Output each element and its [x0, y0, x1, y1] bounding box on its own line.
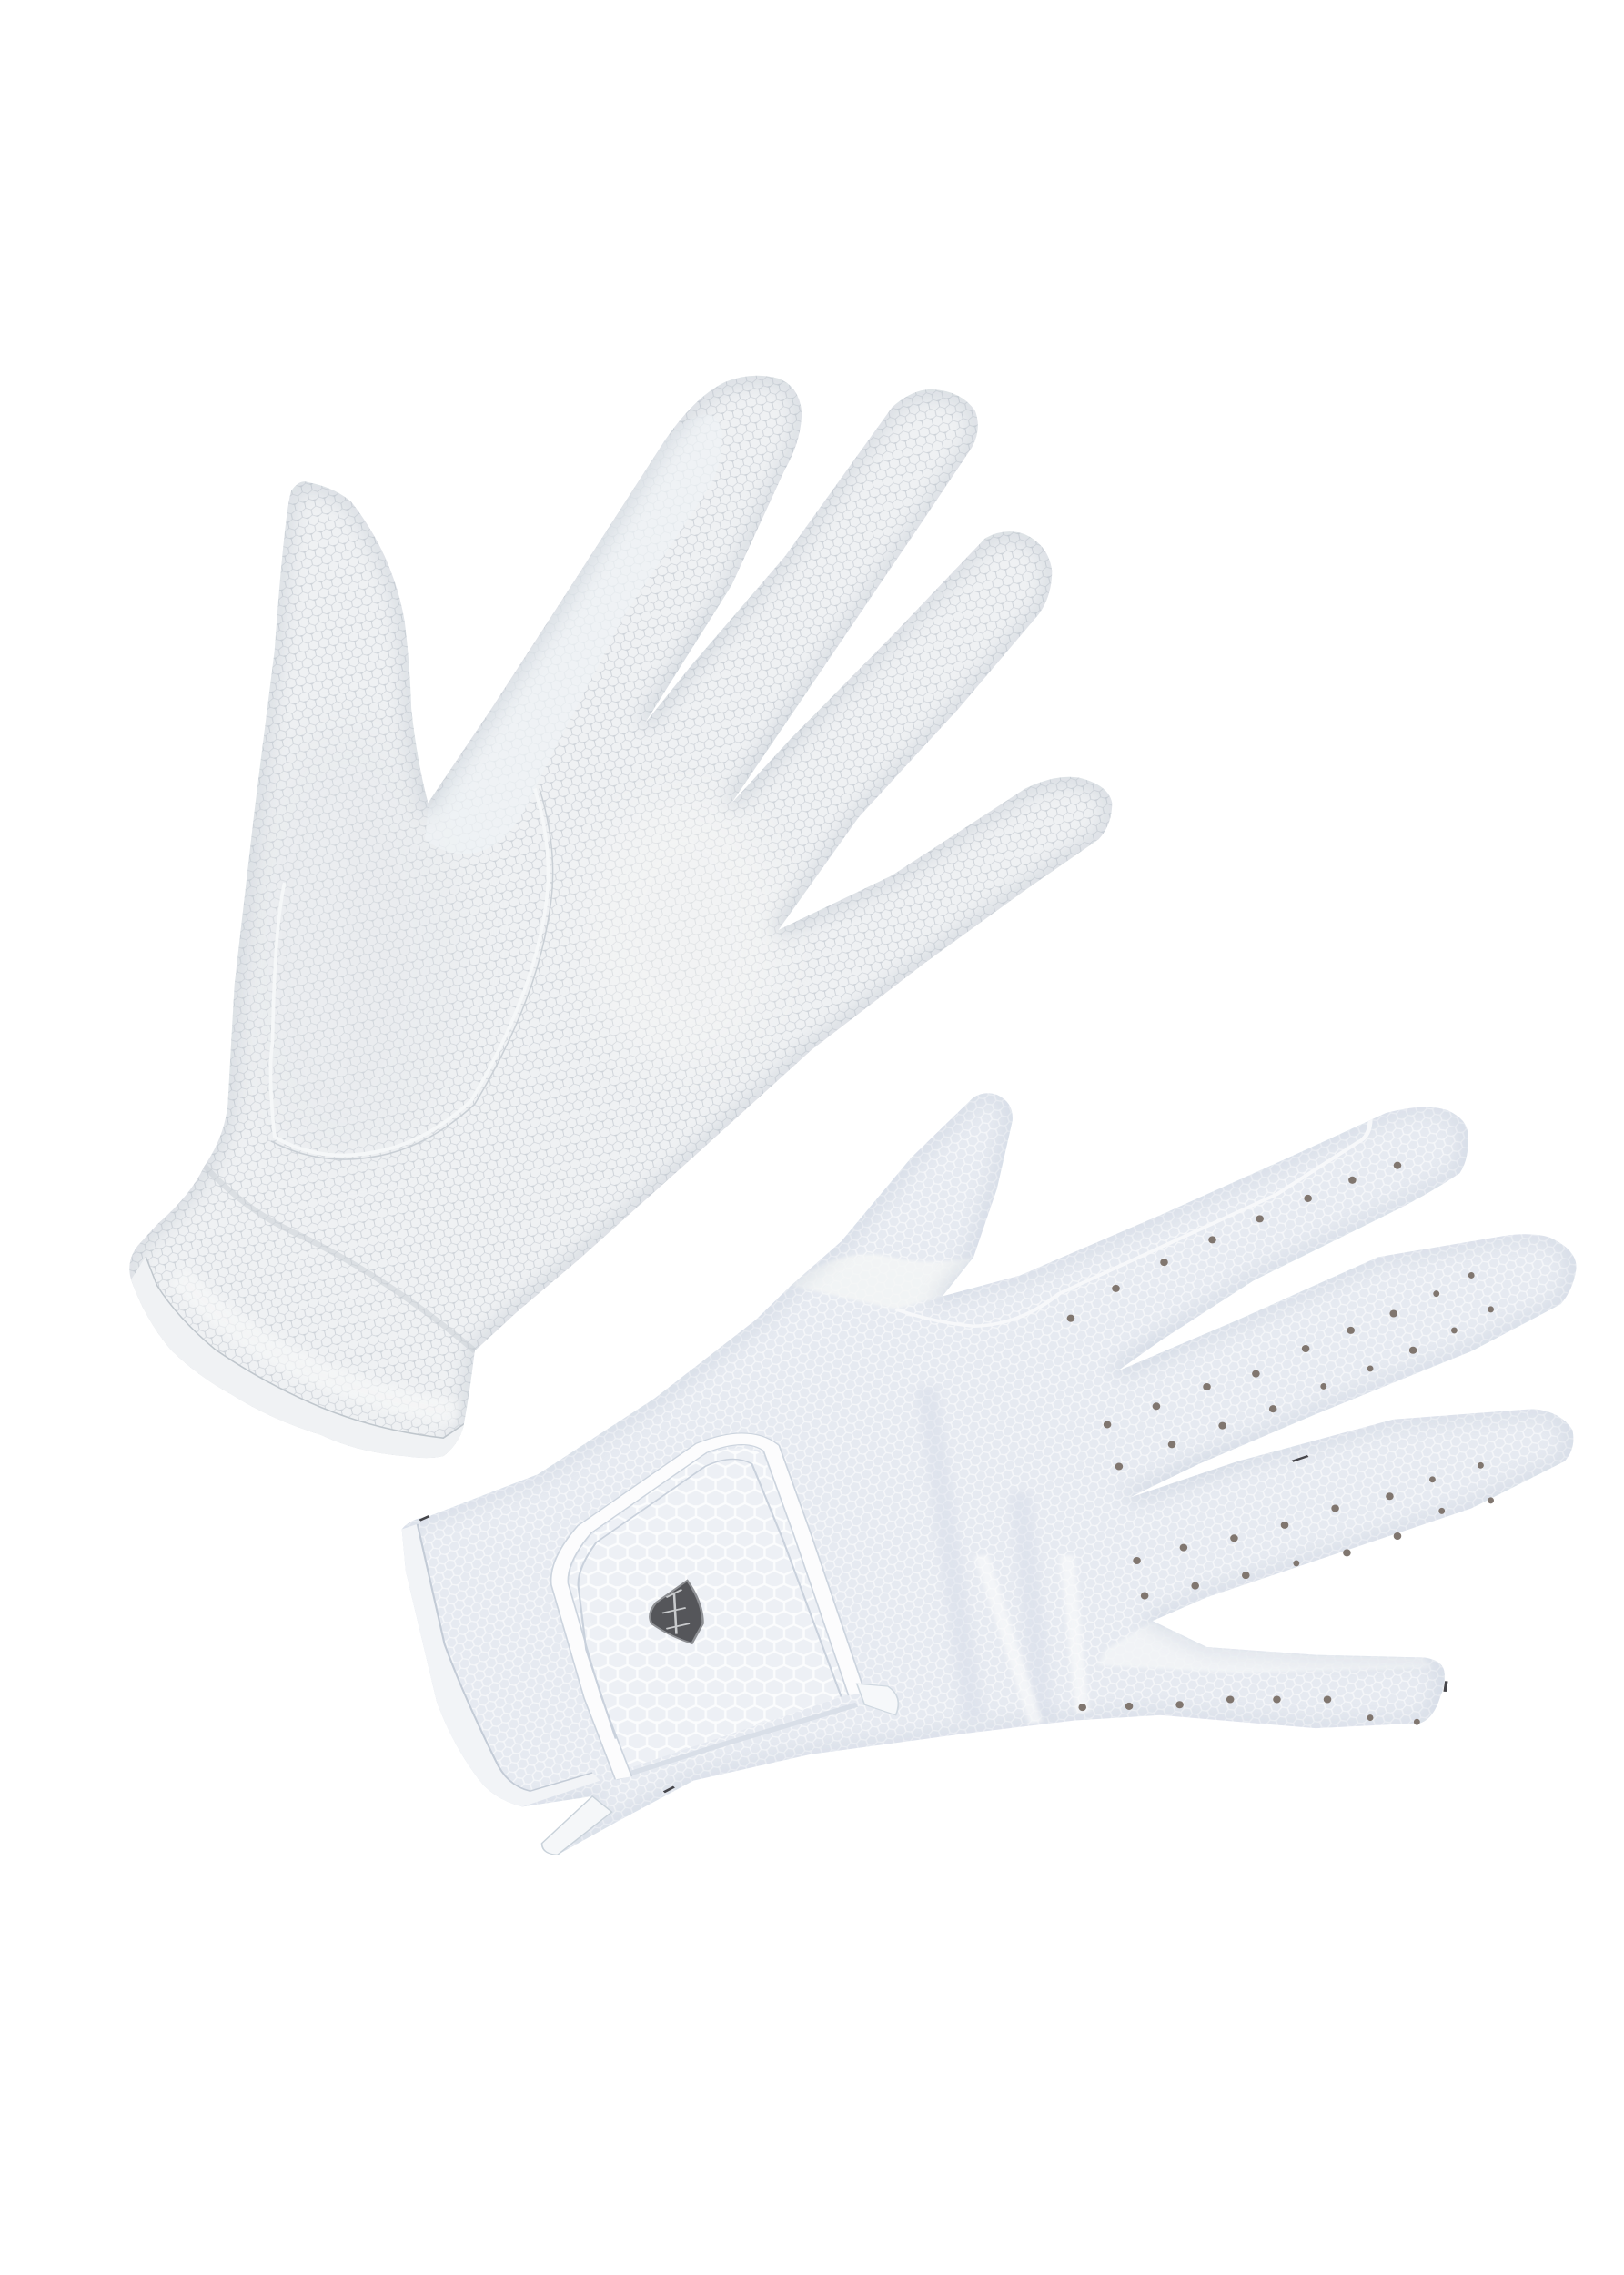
cuff piping edge	[146, 1257, 465, 1438]
index finger seam	[896, 1118, 1370, 1326]
edge shading	[129, 376, 1112, 1458]
smooth little finger base	[1098, 1621, 1432, 1673]
cuff piping edge	[418, 1524, 592, 1791]
little finger perforation row	[1078, 1695, 1420, 1725]
tone overlay	[0, 1018, 1624, 2036]
glove: palm side, upper left	[129, 375, 1112, 1458]
hexagon texture	[402, 1094, 1576, 1853]
cuff fold	[205, 1166, 475, 1350]
dark lining accents	[419, 1456, 1447, 1792]
cuff highlight	[177, 1275, 458, 1412]
illustration: pair of white riding gloves	[129, 375, 1576, 1855]
strap inner stitch	[579, 1459, 842, 1739]
glove body with textured surface	[402, 1093, 1576, 1853]
thumb panel shade	[233, 727, 465, 1163]
ring finger perforation rows	[1133, 1462, 1494, 1600]
glove body with textured surface	[129, 375, 1112, 1458]
hand back folds	[927, 1388, 1044, 1718]
index finger perforation row	[1067, 1162, 1401, 1322]
glove: back of hand, lower right	[402, 1093, 1576, 1855]
icon: shield badge	[650, 1581, 703, 1643]
cuff piping	[131, 1257, 465, 1458]
knuckle highlights	[982, 1555, 1083, 1723]
smooth index finger panel	[425, 414, 722, 854]
strap loop	[857, 1684, 898, 1715]
edge shading	[402, 1093, 1577, 1855]
strap tab	[542, 1796, 611, 1855]
cuff piping	[402, 1524, 600, 1806]
thumb panel seam	[270, 788, 548, 1156]
strap piping	[560, 1439, 857, 1778]
palm highlight	[581, 793, 785, 1069]
smooth thumb base	[791, 1254, 973, 1309]
strap lower edge	[616, 1704, 857, 1778]
perforations	[1067, 1162, 1494, 1725]
hexagon texture	[129, 375, 1112, 1458]
middle finger perforation rows	[1104, 1272, 1494, 1471]
strap panel with larger cells	[569, 1448, 849, 1770]
